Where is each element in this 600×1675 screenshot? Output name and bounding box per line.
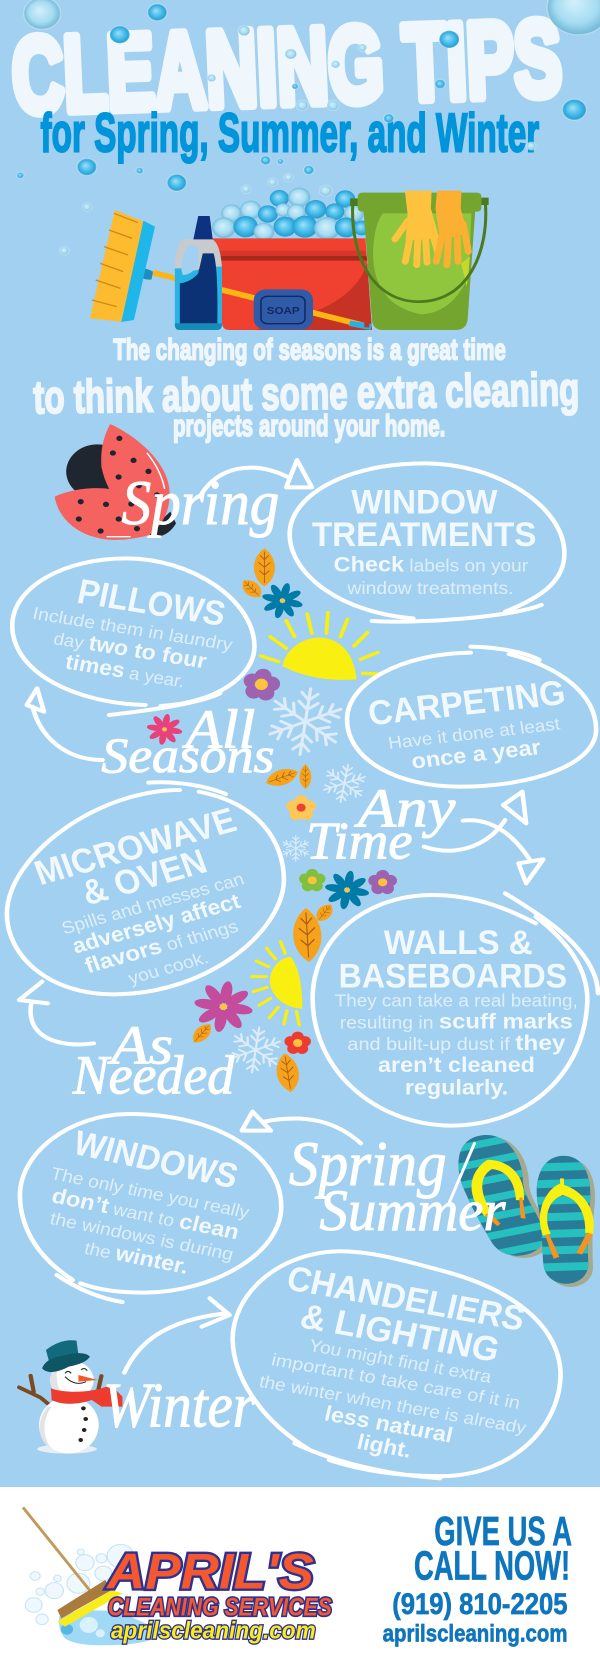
panel: microwave and oven bbox=[7, 782, 284, 994]
icon: snowflake bbox=[226, 1024, 285, 1076]
soap bbox=[254, 289, 313, 330]
panel: windows: don’t want to clean bbox=[49, 1183, 242, 1244]
panel: walls and baseboards: WALLS & bbox=[384, 922, 533, 961]
label: winter: Winter bbox=[103, 1370, 255, 1441]
panel: windows: the windows is during bbox=[48, 1208, 236, 1264]
foam bbox=[212, 188, 370, 241]
call to action bbox=[383, 1509, 572, 1647]
panel: carpeting: CARPETING bbox=[365, 672, 568, 733]
gloves bbox=[395, 191, 468, 265]
panel: pillows: Include them in laundry bbox=[31, 603, 235, 655]
panel: carpeting: once a year bbox=[410, 735, 542, 773]
footer panel bbox=[0, 1487, 600, 1675]
arrow: spring to window treatments bbox=[201, 460, 312, 495]
panel: carpeting bbox=[347, 647, 596, 787]
panel: window treatments: TREATMENTS bbox=[312, 514, 536, 553]
panel: chandeliers and lighting: light. bbox=[355, 1429, 414, 1462]
left flip flop bbox=[458, 1135, 542, 1258]
green bucket bbox=[350, 193, 489, 330]
label: all seasons: Seasons bbox=[101, 727, 274, 783]
icon: flower row bbox=[299, 868, 397, 912]
label: as needed: Needed bbox=[72, 1044, 235, 1105]
header section bbox=[10, 0, 600, 442]
icon: pink flower bbox=[144, 711, 185, 747]
panel: windows: The only time you really bbox=[49, 1163, 252, 1222]
panel: window treatments: window treatments. bbox=[346, 578, 514, 598]
arrow: winter to chandeliers bbox=[124, 1298, 230, 1373]
panel: pillows: day two to four bbox=[52, 625, 209, 673]
icon: leaf bbox=[188, 1020, 216, 1046]
label: spring / summer: Summer bbox=[320, 1178, 506, 1243]
section: footer bbox=[23, 1507, 572, 1647]
panel: microwave and oven: flavors of things bbox=[81, 912, 241, 978]
soap: SOAP bbox=[267, 306, 300, 317]
detergent bottle bbox=[175, 216, 222, 330]
logo text: aprilscleaning.com bbox=[111, 1618, 316, 1644]
label: any time bbox=[306, 777, 456, 870]
arrow: spring summer to windows bbox=[242, 1112, 361, 1143]
panel: windows bbox=[20, 1114, 281, 1302]
icon: yellow flower bbox=[286, 795, 316, 820]
icon: tiny snowflake bbox=[281, 836, 310, 861]
panel: carpeting: Have it done at least bbox=[387, 714, 562, 753]
section: upper tips bbox=[12, 424, 596, 820]
panel: walls and baseboards: and built-up dust if they bbox=[347, 1030, 566, 1055]
logo text: APRIL'S bbox=[105, 1544, 314, 1599]
icon: sun bbox=[261, 613, 381, 680]
panel: chandeliers and lighting: You might find it extra bbox=[307, 1335, 494, 1387]
logo text bbox=[105, 1544, 332, 1644]
intro text bbox=[33, 332, 580, 442]
panel: microwave and oven: Spills and messes can bbox=[59, 869, 247, 938]
icon: ladybug bbox=[55, 424, 176, 540]
panel: window treatments: WINDOW bbox=[351, 482, 498, 521]
panel: chandeliers and lighting: important to take care of it in bbox=[270, 1350, 522, 1413]
arrow: all seasons to pillows bbox=[27, 688, 103, 760]
label: any time: Time bbox=[306, 812, 412, 870]
icon: flip flops bbox=[458, 1135, 596, 1287]
panel: chandeliers and lighting: CHANDELIERS bbox=[283, 1258, 529, 1338]
panel: walls and baseboards bbox=[313, 893, 598, 1126]
panel: chandeliers and lighting: the winter when there is already bbox=[257, 1371, 529, 1438]
label: as needed: As bbox=[107, 1014, 173, 1075]
icon: leaves and flower bbox=[238, 548, 308, 623]
panel: pillows: times a year. bbox=[63, 649, 187, 692]
bubbles bbox=[17, 0, 600, 255]
panel: windows: the winter. bbox=[82, 1234, 191, 1279]
panel: microwave and oven: adversely affect bbox=[69, 888, 244, 958]
icon: orange leaves bbox=[263, 764, 311, 790]
icon: leaves bbox=[292, 901, 337, 963]
label: all seasons: All bbox=[182, 698, 255, 759]
panel: chandeliers and lighting: less natural bbox=[322, 1401, 455, 1447]
panel: walls and baseboards: aren’t cleaned bbox=[378, 1052, 535, 1077]
illustration: cleaning supplies bbox=[90, 188, 489, 330]
label: all seasons bbox=[101, 698, 274, 783]
icon: small snowflake bbox=[319, 761, 369, 805]
panel: walls and baseboards: They can take a real beating, bbox=[335, 991, 578, 1010]
brush bbox=[90, 210, 372, 330]
icon: sun bbox=[252, 942, 302, 1025]
label: spring / summer bbox=[289, 1128, 506, 1243]
panel: pillows: PILLOWS bbox=[74, 571, 229, 633]
label: spring / summer: Spring bbox=[289, 1128, 447, 1199]
panel: windows: WINDOWS bbox=[69, 1123, 243, 1196]
panel: walls and baseboards: resulting in scuff marks bbox=[340, 1009, 573, 1033]
label: Spring: Spring bbox=[122, 467, 279, 538]
section: middle tips bbox=[7, 777, 598, 1126]
panel: window treatments bbox=[290, 463, 564, 622]
panel: microwave and oven: you cook. bbox=[125, 947, 211, 988]
red bucket bbox=[212, 238, 372, 330]
icon: magenta flower bbox=[189, 977, 258, 1036]
panel: pillows bbox=[12, 558, 254, 715]
panel: walls and baseboards: regularly. bbox=[405, 1075, 508, 1099]
label: as needed bbox=[72, 1014, 235, 1105]
icon: leaf bbox=[274, 1052, 302, 1093]
logo foam bbox=[59, 1610, 161, 1645]
broom handle bbox=[23, 1507, 90, 1591]
section: lower tips bbox=[19, 1112, 600, 1478]
panel: microwave and oven: & OVEN bbox=[76, 841, 212, 912]
label: any time: Any bbox=[354, 777, 456, 839]
broom head bbox=[57, 1590, 122, 1627]
arrows: any time bbox=[424, 792, 543, 883]
icon: snowman bbox=[19, 1340, 122, 1454]
right flip flop bbox=[536, 1156, 596, 1287]
panel: window treatments: Check labels on your bbox=[334, 552, 528, 576]
panel: chandeliers and lighting: & LIGHTING bbox=[297, 1296, 503, 1369]
logo: april's cleaning services bbox=[23, 1507, 332, 1645]
logo text: CLEANING SERVICES bbox=[108, 1593, 332, 1621]
icon: large snowflake bbox=[263, 684, 348, 759]
panel: chandeliers and lighting bbox=[233, 1251, 561, 1478]
logo bubbles bbox=[25, 1544, 134, 1625]
arrow: as needed to microwave bbox=[19, 982, 94, 1044]
panel: microwave and oven: MICROWAVE bbox=[29, 800, 241, 892]
icon: purple flower bbox=[240, 666, 283, 702]
icon: red flower bbox=[284, 1032, 311, 1054]
